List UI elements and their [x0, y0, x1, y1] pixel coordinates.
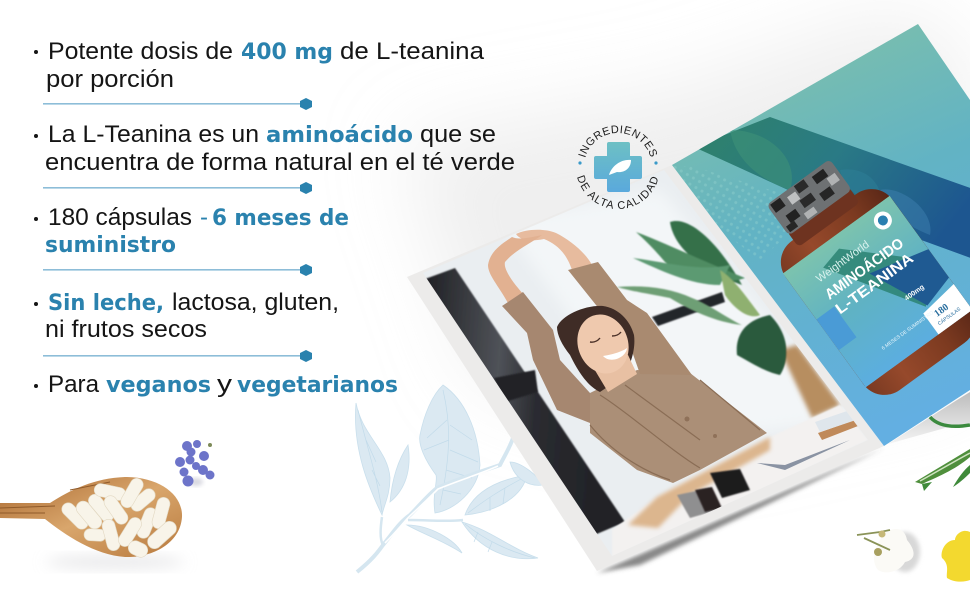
- background horizontal bar: [652, 292, 725, 326]
- brochure right page: [672, 24, 970, 446]
- item: dose: [34, 38, 485, 93]
- yellow flower: [942, 531, 970, 582]
- hair: [557, 306, 634, 392]
- item: amino acid: [34, 121, 515, 176]
- shadow under right page: [888, 392, 970, 444]
- bottle body: [771, 179, 970, 405]
- halftone patch: [674, 166, 786, 259]
- label: [783, 196, 970, 387]
- item: free from: lactosa, gluten,: [172, 289, 339, 316]
- brochure left page: [407, 202, 884, 571]
- white flower: [857, 529, 920, 572]
- item: capsules: suministro: [45, 233, 176, 258]
- item: dose: por porción: [46, 66, 174, 93]
- item: capsules: [34, 204, 349, 258]
- icon: medical cross with leaf: [594, 142, 642, 192]
- left arm skin: [488, 235, 542, 303]
- right sleeve: [568, 262, 692, 375]
- dose: 400mg: [904, 284, 926, 302]
- item: amino acid: aminoácido: [266, 123, 413, 148]
- capsule count tag: CÁPSULAS: [936, 305, 963, 327]
- capsules: [59, 476, 179, 560]
- product name: AMINOÁCIDO: [822, 235, 907, 303]
- item: free from: [34, 289, 339, 343]
- item: amino acid: encuentra de forma natural en el té verde: [45, 149, 515, 176]
- item: capsules: -: [200, 204, 208, 231]
- plant: [617, 221, 840, 418]
- brochure shadow: [597, 448, 884, 573]
- product bottle: [768, 161, 970, 395]
- wooden spoon with capsules: [0, 476, 185, 569]
- spoon: [0, 477, 182, 557]
- jacket torso: [590, 370, 767, 483]
- item: dose: Potente dosis de: [48, 38, 233, 65]
- face: [577, 314, 629, 374]
- item: vegan: y: [217, 371, 232, 398]
- item: capsules: 6 meses de: [212, 206, 349, 231]
- small print: 6 MESES DE SUMINISTRO: [881, 310, 935, 352]
- badge text bottom: DE ALTA CALIDAD: [577, 175, 658, 209]
- item: vegan: veganos: [106, 373, 211, 398]
- capsule count tag: 180: [932, 302, 951, 320]
- brand: WeightWorld: [814, 239, 872, 285]
- cap: [767, 159, 852, 236]
- item: free from: ni frutos secos: [45, 316, 207, 343]
- item: dose: de L-teanina: [340, 38, 485, 65]
- badge: ingredientes de alta calidad: [577, 126, 658, 209]
- neck: [595, 355, 637, 392]
- item: vegan: Para: [48, 371, 100, 398]
- left sleeve: [502, 292, 590, 423]
- right arm skin: [516, 230, 592, 270]
- line-art sprig illustration: [355, 385, 543, 572]
- dark window frame bar: [425, 268, 625, 536]
- badge text top: INGREDIENTES: [578, 126, 657, 158]
- green sprigs: [915, 417, 970, 491]
- benefits list: [34, 38, 515, 398]
- label badge: [874, 212, 892, 230]
- leaf band: [694, 117, 970, 265]
- item: amino acid: que se: [420, 121, 496, 148]
- capsule count tag: [920, 284, 970, 335]
- item: amino acid: La L-Teanina es un: [48, 121, 259, 148]
- item: vegan: [34, 371, 398, 398]
- item: dose: 400 mg: [241, 40, 333, 65]
- item: free from: Sin leche,: [48, 291, 164, 316]
- product name line 2: L-TEANINA: [832, 250, 917, 318]
- item: vegan: vegetarianos: [237, 373, 398, 398]
- purple flowers: [175, 440, 214, 486]
- table: [612, 405, 868, 560]
- item: capsules: 180 cápsulas: [48, 204, 192, 231]
- photo: woman stretching: [426, 186, 858, 535]
